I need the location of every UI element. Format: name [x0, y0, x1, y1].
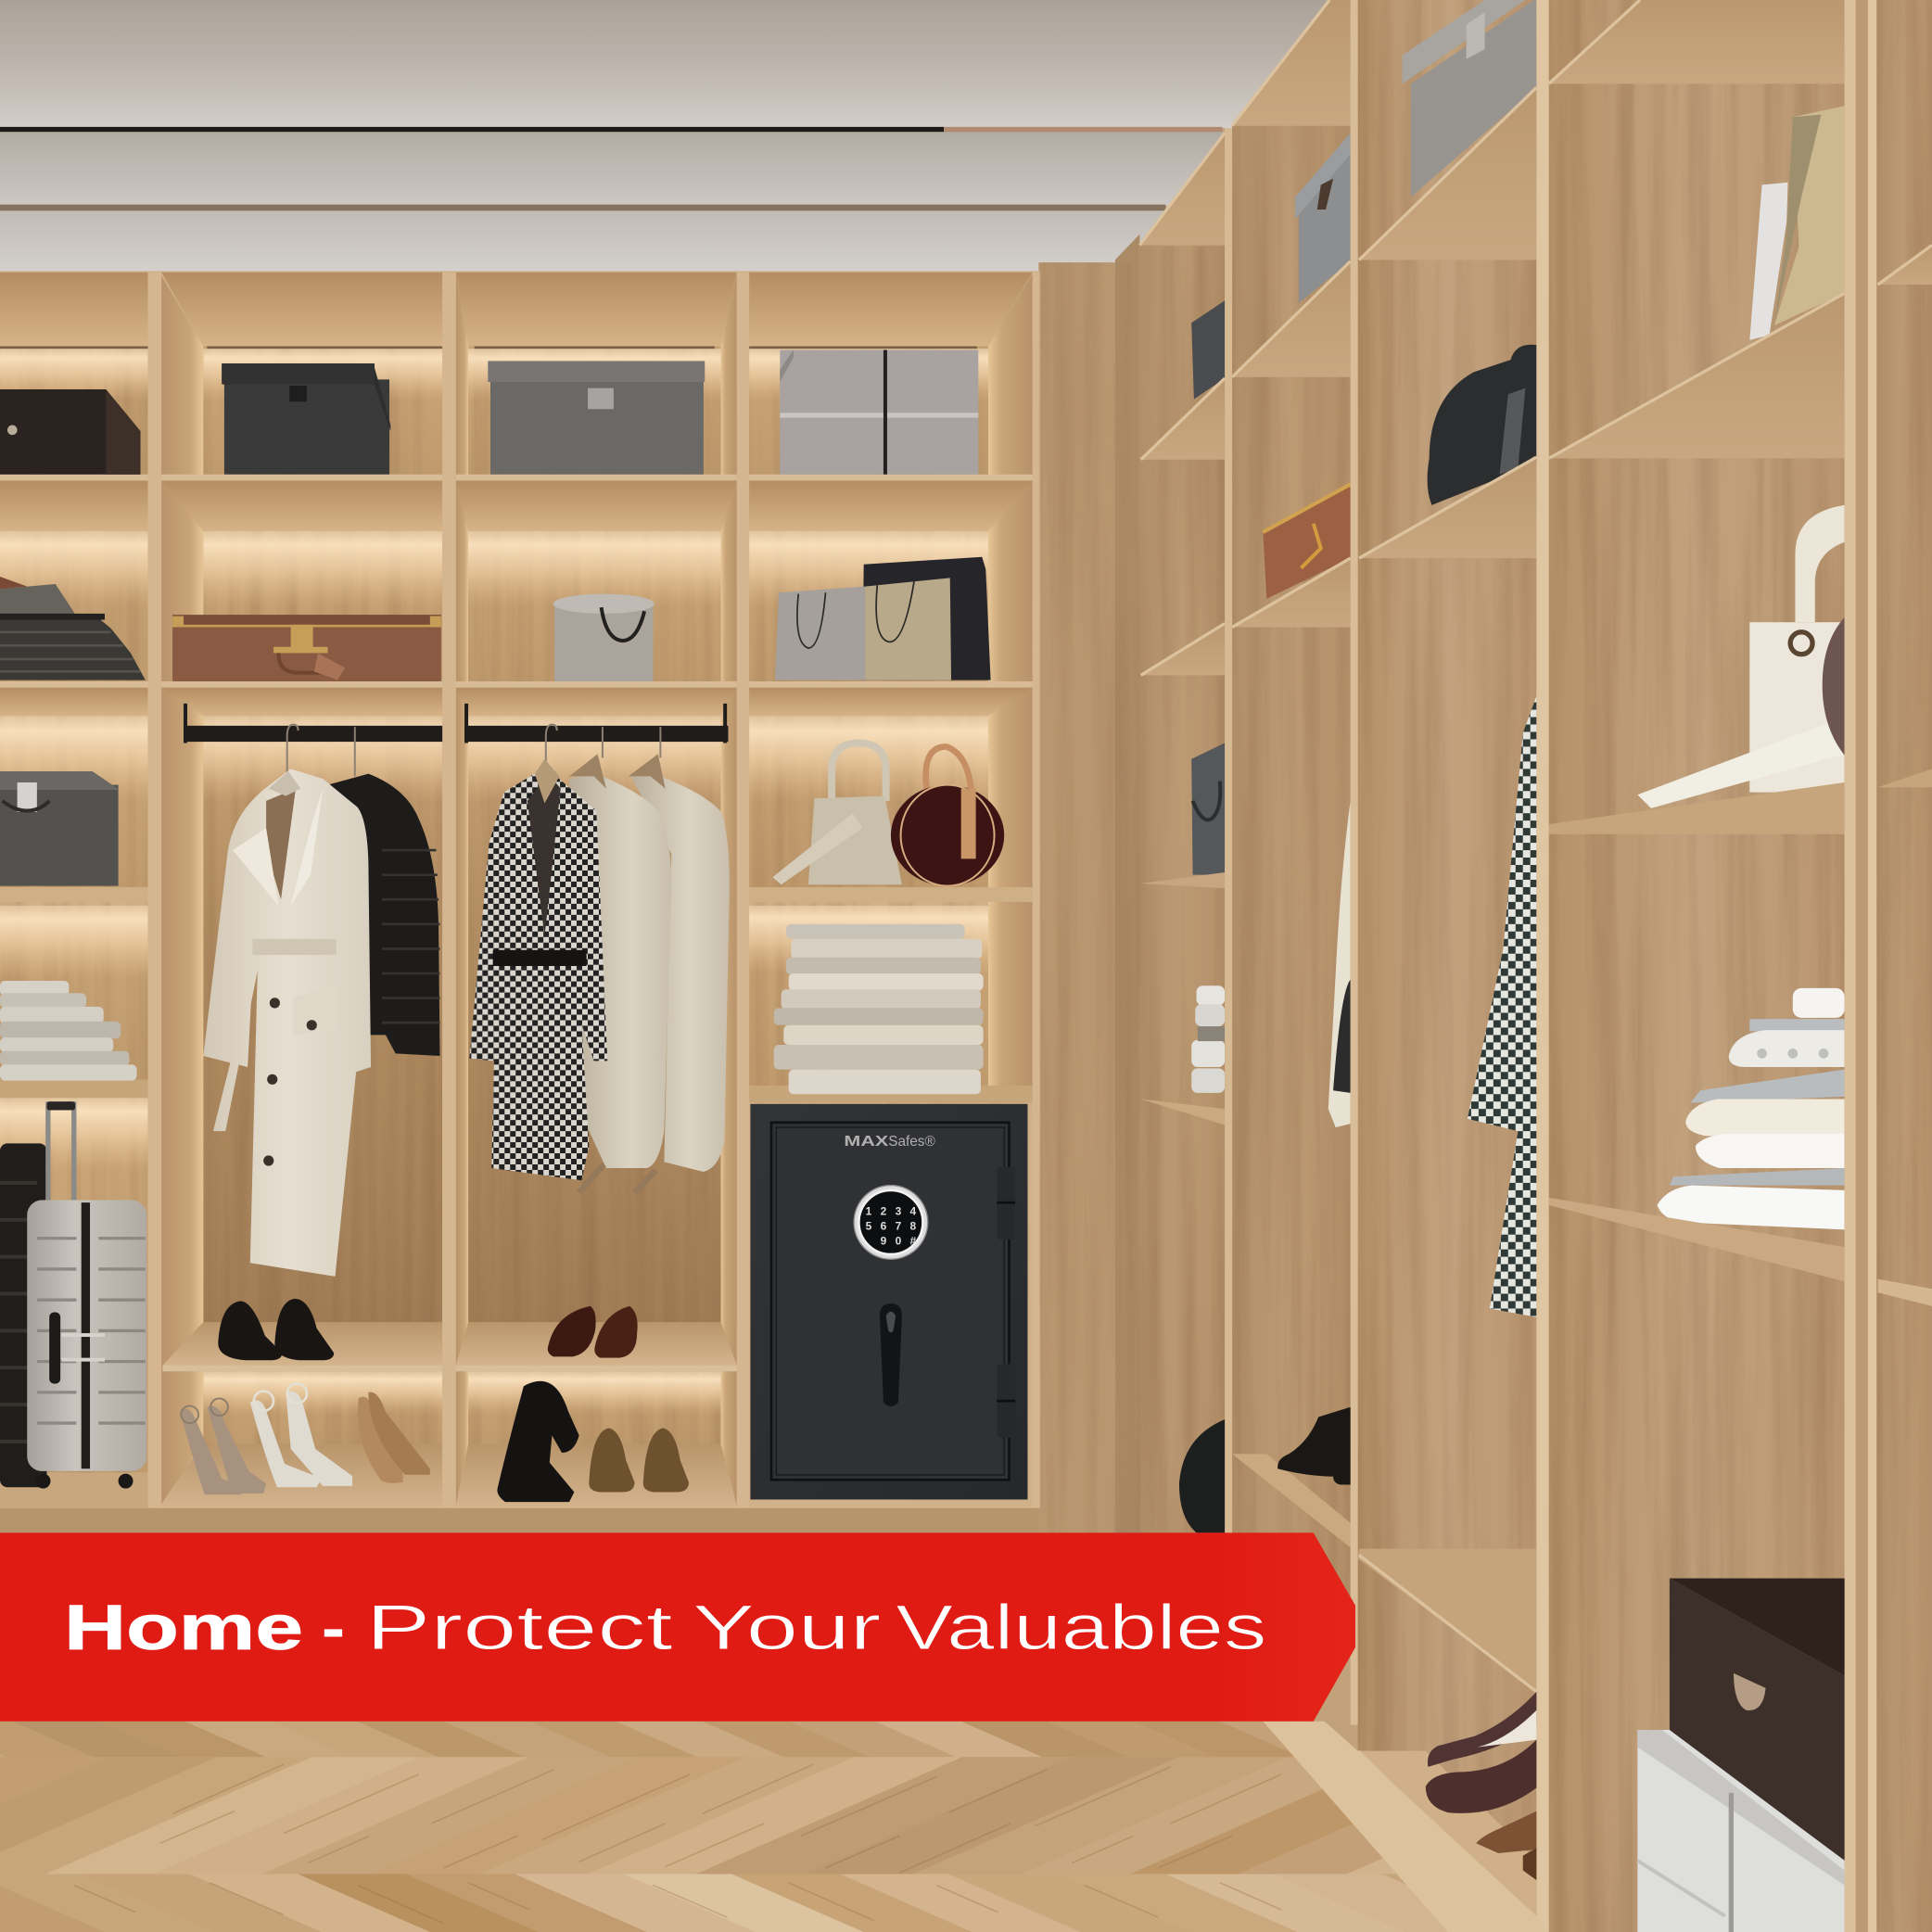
round hat box — [553, 594, 655, 681]
electronic keypad: 5 — [866, 1219, 872, 1232]
leather trunk — [172, 615, 441, 681]
blue grey box — [1295, 133, 1351, 303]
second row objects — [0, 557, 991, 681]
electronic keypad: 1 — [866, 1204, 872, 1217]
dark wood box — [0, 389, 141, 475]
round burgundy bag — [891, 746, 1004, 886]
safe handle — [880, 1303, 902, 1406]
grey case bay one — [1191, 743, 1225, 875]
shopping bags — [775, 557, 991, 680]
black boots — [497, 1381, 579, 1502]
red banner — [0, 1532, 1355, 1722]
electronic keypad: 9 — [881, 1234, 887, 1247]
folded dark blanket — [0, 577, 146, 680]
electronic keypad: 2 — [881, 1204, 887, 1217]
grey lidded box — [488, 361, 705, 475]
dark suitcase — [0, 1143, 47, 1487]
folded linens left — [0, 981, 137, 1081]
black leather jacket — [328, 774, 439, 1056]
men's shoes and loafers — [218, 1299, 638, 1360]
safe logo — [844, 1134, 936, 1150]
brown oxford shoes — [589, 1428, 689, 1493]
white stacked box bottom — [1637, 1730, 1845, 1932]
black duffel bag — [1428, 345, 1536, 505]
right cabinet posts — [1225, 0, 1876, 1932]
safe hinges — [997, 1167, 1015, 1438]
brown case — [1263, 484, 1351, 599]
safe logo: MAX — [844, 1134, 889, 1150]
safe body — [750, 1104, 1027, 1499]
left cabinet back panels — [0, 271, 1040, 1534]
silver suitcase — [27, 1101, 146, 1489]
shelves: left cabinet — [0, 273, 1033, 1371]
middle row of planks — [0, 1757, 1396, 1875]
cabinet floors for hanging bays — [0, 1444, 737, 1508]
right side boxes and items — [1191, 0, 1845, 1317]
ceiling — [0, 0, 1355, 273]
LED glow strips — [0, 349, 989, 1415]
wood grain on right cabinet — [1038, 0, 1932, 1932]
banner text: Home — [64, 1592, 303, 1663]
floor-level items on right — [1179, 1407, 1845, 1932]
safe door — [771, 1123, 1010, 1480]
banner text: Your — [693, 1592, 881, 1663]
high heels on floor shelf — [1426, 1692, 1536, 1880]
white handbag — [1637, 505, 1845, 808]
lower row of planks — [0, 1875, 1514, 1932]
electronic keypad — [854, 1186, 928, 1259]
houndstooth coat side — [1468, 696, 1536, 1317]
shelf front edges — [1139, 0, 1932, 1929]
white folded stack — [1658, 988, 1845, 1229]
white coat edge — [1328, 801, 1351, 1127]
electronic keypad: 3 — [896, 1204, 902, 1217]
electronic keypad: # — [910, 1234, 917, 1247]
banner text — [64, 1592, 1266, 1663]
side panels — [160, 273, 1033, 1506]
vertical posts and plinth — [0, 273, 1040, 1532]
garment bags — [569, 754, 730, 1193]
black lidded box — [222, 363, 390, 475]
electronic keypad: 7 — [896, 1219, 902, 1232]
baseboard — [1263, 1722, 1549, 1932]
safe — [750, 1104, 1027, 1499]
banner text: - — [322, 1592, 345, 1663]
electronic keypad: 4 — [910, 1204, 917, 1217]
storage boxes top row — [0, 350, 978, 475]
grey case on left shelf — [0, 771, 120, 886]
electronic keypad: 8 — [910, 1219, 917, 1232]
dark wood box with pull — [1670, 1579, 1845, 1861]
paper bags — [1749, 106, 1845, 340]
right cabinet shelves — [1139, 0, 1932, 1932]
dark textured box — [1191, 300, 1225, 400]
safe logo: Safes® — [888, 1134, 936, 1150]
folded whites bay one — [1191, 985, 1225, 1093]
herringbone floor — [0, 1722, 1448, 1932]
houndstooth coat — [469, 759, 607, 1180]
folded linens centre — [774, 924, 984, 1094]
upper row of planks — [0, 1722, 1388, 1757]
white quilted handbag — [772, 743, 902, 884]
banner text: Protect — [366, 1592, 673, 1663]
white stacked boxes — [780, 350, 978, 475]
electronic keypad: 6 — [881, 1219, 887, 1232]
banner text: Valuables — [896, 1592, 1266, 1663]
grey box top — [1402, 0, 1536, 197]
right cabinet back panels — [1138, 0, 1932, 1932]
floor grain lines — [74, 1764, 1281, 1924]
electronic keypad: 0 — [896, 1234, 902, 1247]
black oxford shoe — [1277, 1407, 1351, 1485]
heels row — [180, 1384, 430, 1494]
black bag on floor — [1179, 1419, 1225, 1532]
trench coat — [203, 769, 371, 1277]
corner pillar — [1038, 235, 1139, 1544]
clothes rails — [184, 704, 728, 743]
wood grain on left cabinet — [0, 346, 1035, 1493]
hangers — [287, 725, 660, 776]
